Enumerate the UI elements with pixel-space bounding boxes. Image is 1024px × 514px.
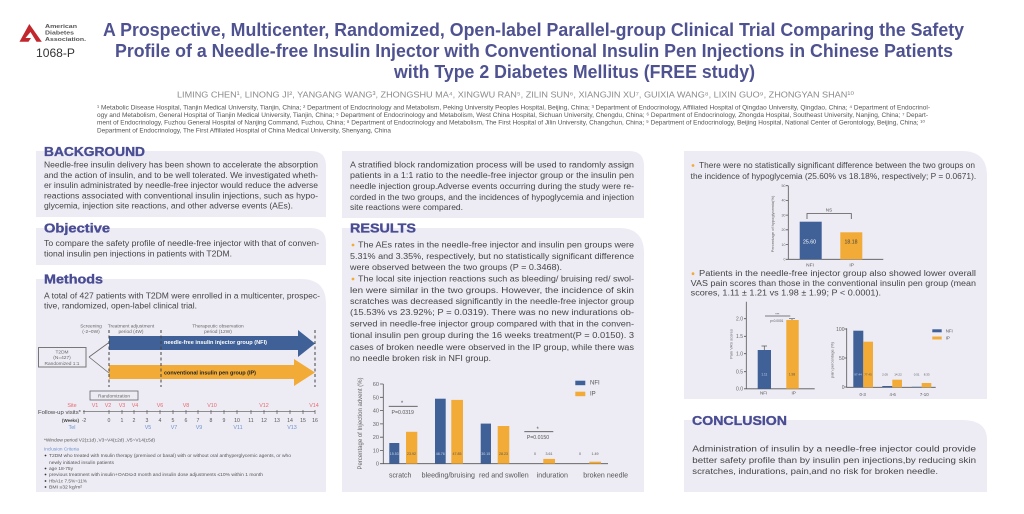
box: T2DM: Randomized 1:1	[45, 361, 80, 367]
text: inclusion criteria	[44, 447, 292, 490]
title: A Prospective, Multicenter, Randomized, Open-label Parallel-group Clinical Trial Comparing the Safety	[103, 20, 964, 40]
text: results body: served in needle-free injector group compared with that in the conven-	[350, 320, 634, 328]
bar chart: VAS score: 0.5	[736, 370, 743, 376]
timeline: weeks: 16	[312, 418, 318, 424]
text: hypoglycemia: There were no statistically significant difference between the two groups on	[699, 161, 975, 170]
bar chart: VAS score: 1.11	[761, 372, 768, 376]
text: randomization body: corded in the two groups, and the incidences of hypoglycemia and injection	[350, 193, 634, 202]
logo: American Diabetes Association	[20, 24, 87, 43]
timeline: weeks: 11	[248, 418, 254, 424]
timeline: telephone visits: V11	[233, 425, 243, 431]
bar chart: pain percentage: 0	[842, 385, 845, 391]
bar chart: hypoglycemia: NS	[826, 208, 832, 212]
text: randomization body: needle injection group.Adverse events occurring during the study were re-	[350, 182, 634, 191]
bar chart: VAS score: 1.5	[736, 334, 743, 340]
bar chart: hypoglycemia	[770, 184, 883, 268]
bar chart: hypoglycemia: 18.18	[845, 240, 858, 246]
timeline: weeks: 8	[210, 418, 213, 424]
title: with Type 2 Diabetes Mellitus (FREE study)	[393, 62, 755, 82]
period labels: Therapeutic observation	[192, 324, 244, 330]
timeline: site visits: V14	[309, 403, 319, 409]
bar chart: pain percentage: 2.05	[882, 372, 888, 376]
text: background body: and the action of insulin, and to be well tolerated. We investigated wheth-	[44, 171, 318, 180]
panel: conclusion	[684, 413, 987, 492]
bar chart: VAS score: ***	[775, 312, 780, 316]
text: methods body: A total of 427 patients with T2DM were enrolled in a multicenter, prospec-	[44, 291, 320, 300]
value labels: 23.92	[407, 452, 416, 456]
timeline: weeks: 13	[274, 418, 280, 424]
text: inclusion criteria: age 18-75y	[49, 466, 74, 471]
bar chart: VAS score: IP	[792, 390, 796, 396]
significance: induration: *	[537, 427, 540, 433]
timeline: weeks: 6	[185, 418, 188, 424]
text: inclusion criteria: T2DM who treated with Insulin therapy (premixed or basal) with or without oral anthyperglycemic agents, or who	[49, 453, 292, 458]
legend: IP	[590, 392, 596, 398]
text: results body: The local site injection reactions such as bleeding/ bruising red/ swol-	[358, 274, 634, 284]
y axis: 40	[373, 409, 379, 415]
arrow: IP group: conventional insulin pen group (IP)	[164, 370, 256, 376]
timeline: axis	[38, 410, 315, 416]
y axis	[358, 377, 608, 470]
legend: NFI	[946, 328, 953, 334]
timeline: telephone visits: V7	[171, 425, 177, 431]
authors: LIMING CHEN¹, LINONG JI², YANGANG WANG³, ZHONGSHU MA⁴, XINGWU RAN⁵, ZILIN SUN⁶, XIANGJIN XU⁷, GUIXIA WANG⁸, LIXIN GUO⁹, ZHONGYAN SHAN¹⁰	[177, 90, 854, 100]
bar chart: pain percentage: 0-3	[860, 392, 866, 397]
bar chart: hypoglycemia: 40	[782, 199, 786, 203]
timeline: weeks: 14	[287, 418, 293, 424]
text: inclusion criteria: HbA1c 7.5%~11%	[49, 478, 87, 483]
period labels: period (4W)	[118, 329, 144, 335]
significance: scratch	[389, 401, 418, 416]
text: results body: were observed between the two groups (P = 0.3468).	[349, 263, 562, 272]
category labels: bleeding/bruising	[422, 472, 475, 480]
timeline: weeks: 9	[223, 418, 226, 424]
box: randomization	[90, 391, 138, 400]
timeline: telephone visits: V13	[287, 425, 297, 431]
text: inclusion criteria: previous treatment with insulin+OADs≥3 month and insulin dose adjustments ≤10% within 1 month	[49, 472, 264, 477]
timeline: weeks: 4	[159, 418, 162, 424]
bar chart: pain percentage: 97.44	[854, 372, 862, 376]
legend	[575, 381, 600, 398]
text: randomization body: A stratified block randomization process will be used to randomly assign	[350, 160, 634, 170]
text: background body: reactions associated with conventional insulin injections, such as hypo-	[44, 191, 318, 200]
text: VAS pain scores	[691, 269, 976, 298]
bar chart: hypoglycemia: NFI	[806, 262, 814, 268]
legend: IP	[946, 336, 950, 340]
bar chart: VAS score: 1.98	[789, 372, 795, 376]
y axis: 20	[373, 435, 379, 441]
box: T2DM: (N=427)	[53, 355, 71, 361]
timeline: weeks: 1	[121, 418, 124, 424]
y axis: 0	[376, 462, 379, 468]
panel: hypoglycemia and pain	[684, 151, 987, 399]
panel: results	[342, 221, 644, 492]
text: randomization body: patients in a 1:1 ratio to the needle-free injector group or the insulin pen	[350, 171, 634, 180]
bar chart: pain percentage: 7-10	[920, 392, 929, 397]
text: randomization body: site reactions were compared.	[350, 203, 463, 212]
bar chart: hypoglycemia: 0	[784, 258, 786, 262]
bar chart: pain percentage: 100	[836, 327, 845, 333]
heading: methods: Methods	[44, 272, 103, 287]
timeline: telephone visits: Tel	[69, 425, 75, 431]
timeline: site visits	[67, 403, 319, 409]
significance: induration	[524, 427, 553, 441]
period labels: (-2~0W)	[82, 329, 100, 335]
period labels: Screening	[80, 324, 102, 330]
bar chart: pain percentage: pain percentage (%)	[830, 341, 834, 378]
text: inclusion criteria: Inclusion Criteria	[44, 447, 79, 452]
period labels	[80, 324, 244, 335]
timeline: site visits: V8	[183, 403, 189, 409]
timeline: telephone visits: V5	[145, 425, 151, 431]
text: results body: (15.53% vs 23.92%; P = 0.0319). There was no new indurations ob-	[350, 308, 634, 317]
text: VAS pain scores: scores, 1.11 ± 1.21 vs 1.98 ± 1.99; P < 0.0001).	[691, 288, 881, 298]
bar chart: pain percentage: 0.51	[914, 372, 920, 376]
significance: induration: P=0.0150	[527, 435, 549, 441]
bar chart: VAS score: Pain VAS scores	[728, 329, 734, 359]
text: background body: glycemia, injection site reactions, and other adverse events (AEs).	[44, 202, 293, 211]
heading: conclusion: CONCLUSION	[692, 413, 787, 428]
text: inclusion criteria: BMI ≤32 kg/m²	[49, 485, 83, 490]
heading: results: RESULTS	[350, 221, 416, 236]
title	[103, 20, 964, 82]
timeline: weeks: 12	[261, 418, 267, 424]
text: hypoglycemia	[691, 161, 976, 181]
bar chart: pain percentage: 8.33	[924, 372, 930, 376]
affiliations: Department of Endocrinology, The First Affiliated Hospital of China Medical University, Shenyang, China	[97, 128, 392, 134]
text: conclusion body	[692, 444, 977, 476]
category labels: induration	[537, 472, 568, 480]
timeline: site visits: V4	[132, 403, 138, 409]
logo: American Diabetes Association: Association.	[45, 37, 87, 43]
timeline: weeks: (Weeks)	[62, 418, 79, 424]
value labels: 15.53	[390, 452, 399, 456]
text: background body	[44, 161, 319, 211]
bar chart: VAS score: NFI	[760, 390, 767, 396]
panel: randomization text	[342, 151, 644, 218]
bar chart: hypoglycemia: 10	[782, 243, 786, 247]
text: results body: The AEs rates in the needle-free injector and insulin pen groups were	[358, 240, 635, 250]
period labels: period (12W)	[204, 329, 232, 335]
bar chart: hypoglycemia: 20	[782, 228, 786, 232]
text: results body: scratches was decreased significantly in the needle-free injector group	[350, 297, 635, 306]
timeline: weeks: 3	[146, 418, 149, 424]
timeline: site visits: V12	[259, 403, 269, 409]
bar chart: VAS score	[728, 302, 815, 396]
y axis: 60	[373, 382, 379, 388]
text: objective body	[44, 239, 319, 258]
affiliations: ogy and Metabolism, General Hospital of Tianjin Medical University, Tianjin, China; ⁵ Department of Endocrinology and Metabolism, West China Hospital, Sichuan University, Chengdu, China; ⁶ Department of Endocrinology, Zhongda Hospital, Southeast University, Nanjing, China; ⁷ Depart-	[97, 112, 928, 119]
bar chart: pain percentage	[830, 327, 953, 397]
value labels: 30.15	[481, 452, 490, 456]
timeline: site visits: V1	[92, 403, 98, 409]
text: methods body	[44, 291, 320, 311]
bar chart: pain percentage: 4-6	[890, 392, 896, 397]
value labels: 3.61	[546, 452, 552, 456]
category labels: broken needle	[583, 472, 628, 480]
bar chart: hypoglycemia: 50	[782, 184, 786, 188]
text: conclusion body: better safety profile than by insulin pen injections,by reducing skin	[692, 456, 976, 465]
value labels: 0	[579, 452, 581, 456]
timeline: site visits: V2	[105, 403, 111, 409]
category labels	[389, 472, 628, 480]
heading: objective: Objective	[44, 221, 110, 236]
value labels: 1.49	[592, 452, 598, 456]
bar chart: pain percentage: 14.22	[894, 372, 902, 376]
text: VAS pain scores: VAS pain scores than those in the conventional insulin pen group (mean	[691, 279, 976, 288]
panel: background	[36, 144, 326, 217]
bar chart: pain percentage: 77.45	[864, 372, 872, 376]
significance: scratch: P=0.0319	[392, 410, 414, 416]
text: conclusion body: scratches, indurations, pain,and no risk for broken needle.	[692, 467, 938, 476]
affiliations	[97, 104, 930, 134]
text: results body: len were similar in the two groups. However, the incidence of skin	[350, 286, 634, 295]
logo: American Diabetes Association: American	[45, 24, 78, 30]
timeline: weeks: 15	[300, 418, 306, 424]
heading: background: BACKGROUND	[44, 144, 145, 159]
timeline: weeks: 7	[197, 418, 200, 424]
poster number: 1068-P	[36, 48, 75, 60]
text: randomization body	[350, 160, 634, 212]
text: results body: cases of broken needle were observed in the IP group, while there was	[350, 343, 634, 352]
category labels: scratch	[389, 472, 411, 480]
text: objective body: To compare the safety profile of needle-free injector with that of conven-	[44, 239, 319, 248]
value labels: 47.85	[452, 452, 462, 456]
text: results body: no needle broken risk in NFI group.	[350, 354, 491, 363]
timeline: site visits: V3	[119, 403, 125, 409]
timeline: weeks: -2	[82, 418, 86, 424]
timeline: site visits: V10	[207, 403, 217, 409]
text: results body	[349, 240, 635, 363]
bar chart: hypoglycemia: Percentage of hypoglycemia(%)	[770, 195, 775, 252]
text: methods body: tive, randomized, open-label clinical trial.	[44, 302, 197, 311]
box: randomization: Randomization	[98, 393, 130, 399]
arrow: IP group	[109, 359, 315, 386]
y axis: 50	[373, 395, 379, 401]
arrow: NFI group	[109, 330, 315, 357]
panel: methods	[36, 272, 326, 492]
text: objective body: tional insulin pen injections in patients with T2DM.	[44, 250, 232, 258]
timeline: axis: Follow-up visits*	[38, 410, 82, 416]
timeline: telephone visits	[69, 425, 297, 431]
text: results body: tional insulin pen group during the 16 weeks treatment(P = 0.0150). 3	[350, 331, 635, 340]
legend	[932, 328, 953, 340]
bar chart: VAS score: 2.0	[736, 316, 743, 322]
y axis: 10	[373, 448, 379, 454]
legend: NFI	[590, 381, 600, 387]
text: inclusion criteria: newly initiated insulin patients	[49, 460, 115, 465]
y axis: 30	[373, 422, 379, 428]
logo: American Diabetes Association: Diabetes	[45, 30, 74, 36]
bar chart: VAS score: 1.0	[736, 352, 743, 358]
category labels: red and swollen	[479, 472, 529, 480]
panel: objective	[36, 221, 326, 265]
timeline: weeks: 0	[108, 418, 111, 424]
affiliations: ment of Endocrinology, Fuzhou General Hospital of Nanjing Command, Fuzhou, China; ⁸ Department of Endocrinology and Metabolism, The First Hospital of Jilin University, Changchun, China; ⁹ Department of Endocrinology, Beijing Hospital, National Center of Gerontology, Beijing, China; ¹⁰	[97, 120, 926, 127]
affiliations: ¹ Metabolic Disease Hospital, Tianjin Medical University, Tianjin, China; ² Department of Endocrinology and Metabolism, Peking University Peoples Hospital, Beijing, China; ³ Department of Endocrinology, Affiliated Hospital of Qingdao University, Qingdao, China; ⁴ Department of Endocrinol-	[97, 104, 930, 112]
bar chart: VAS score: 0.0	[736, 386, 743, 392]
timeline: site visits: V6	[157, 403, 163, 409]
arrow: NFI group: needle-free insulin injector group (NFI)	[164, 340, 267, 346]
text: conclusion body: Administration of insulin by a needle-free injector could provide	[692, 444, 977, 454]
diagram: study design	[38, 324, 319, 431]
value labels: 48.76	[436, 452, 445, 456]
significance: scratch: *	[401, 401, 404, 407]
box: T2DM	[38, 348, 86, 367]
timeline: telephone visits: V9	[196, 425, 202, 431]
box: T2DM: T2DM	[55, 350, 69, 356]
bar chart: injection adverse events	[358, 377, 628, 480]
text: VAS pain scores: Patients in the needle-free injector group also showed lower overall	[699, 269, 976, 278]
title: Profile of a Needle-free Insulin Injector with Conventional Insulin Pen Injections in Chinese Patients	[115, 41, 953, 61]
timeline: weeks: 10	[234, 418, 240, 424]
timeline: weeks: 2	[133, 418, 136, 424]
bar chart: hypoglycemia: 30	[782, 213, 786, 217]
text: window period: *Window period V2(±1d) ,V3~V4(±2d) ,V5~V14(±5d)	[44, 438, 156, 442]
timeline: weeks: 5	[172, 418, 175, 424]
bar chart: hypoglycemia: 25.60	[803, 240, 816, 246]
value labels: 0	[534, 452, 536, 456]
text: hypoglycemia: the incidence of hypoglycemia (25.60% vs 18.18%, respectively; P = 0.0671).	[691, 172, 976, 181]
period labels: Treatment adjustment	[108, 324, 155, 330]
value labels	[390, 452, 598, 456]
value labels: 28.23	[499, 452, 508, 456]
text: background body: er insulin administrated by needle-free injector would reduce the adverse	[44, 181, 319, 190]
bar chart: VAS score: p<0.0001	[770, 319, 784, 323]
bar chart: hypoglycemia: IP	[849, 262, 854, 268]
text: results body: 5.31% and 3.35%, respectively, but no statistically significant difference	[350, 252, 635, 261]
y axis: Percentage of Injection advent (%)	[358, 377, 364, 470]
text: background body: Needle-free insulin delivery has been shown to accelerate the absorption	[44, 161, 318, 170]
bar chart: pain percentage: 50	[839, 356, 845, 362]
timeline: site visits: Site	[67, 403, 77, 409]
bars	[389, 399, 601, 464]
timeline: weeks	[62, 418, 318, 424]
